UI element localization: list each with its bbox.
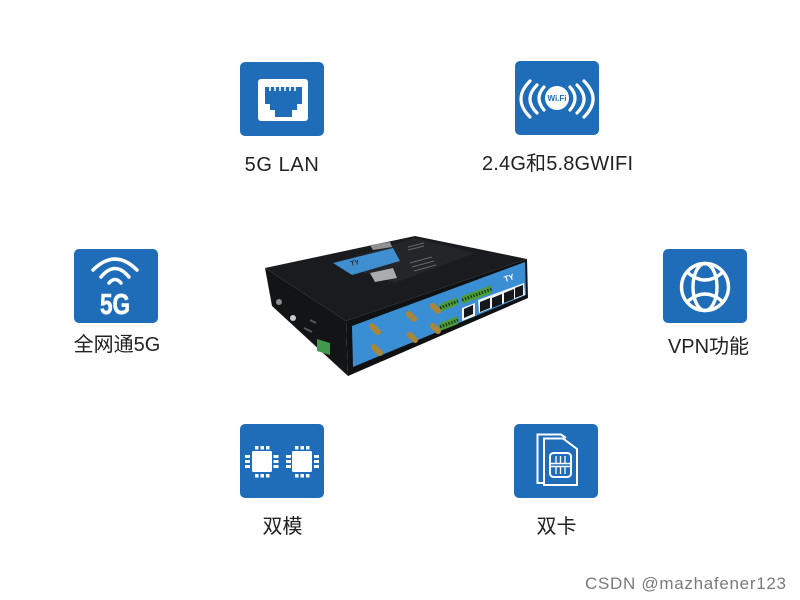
icon: WiFi: [515, 61, 599, 135]
router top face: [265, 236, 527, 321]
terminal teeth: [440, 289, 492, 327]
icon: 5G signal: [74, 249, 158, 323]
icon: 5G signal: 5G: [100, 289, 130, 321]
icon: WiFi: Wi.Fi: [547, 94, 567, 103]
icon: dual chips: [240, 424, 324, 498]
side knobs: [276, 299, 282, 305]
LAN port strip: [478, 283, 525, 313]
blue sticker: [333, 248, 400, 275]
power terminal: [317, 339, 330, 355]
label: full network 5G: 全网通5G: [74, 333, 160, 356]
white tag: [370, 242, 392, 250]
label: 2.4G and 5.8G WIFI: 2.4G和5.8GWIFI: [482, 152, 633, 175]
label: VPN function: VPN功能: [668, 335, 749, 358]
router left side: [265, 268, 348, 376]
router device: [265, 236, 528, 376]
label: dual SIM card: 双卡: [536, 515, 576, 538]
label: dual mode: 双模: [262, 515, 302, 538]
top label area: [335, 238, 475, 283]
sticker logo: TY: [350, 259, 360, 268]
QR code: [370, 268, 397, 282]
LAN ports: [480, 285, 523, 312]
router front face: [346, 259, 528, 376]
icon: VPN globe: [663, 249, 747, 323]
WAN port: [462, 303, 475, 321]
icon: LAN port: [240, 62, 324, 136]
label: 5G LAN: 5G LAN: [245, 154, 319, 176]
green terminals: [440, 285, 492, 331]
watermark: CSDN @mazhafener123: [585, 574, 786, 593]
antenna connectors: [372, 306, 438, 353]
spec text lines: [408, 243, 436, 271]
panel logo: TY: [503, 272, 516, 284]
blue front panel: [352, 262, 526, 367]
icon: dual SIM: [514, 424, 598, 498]
